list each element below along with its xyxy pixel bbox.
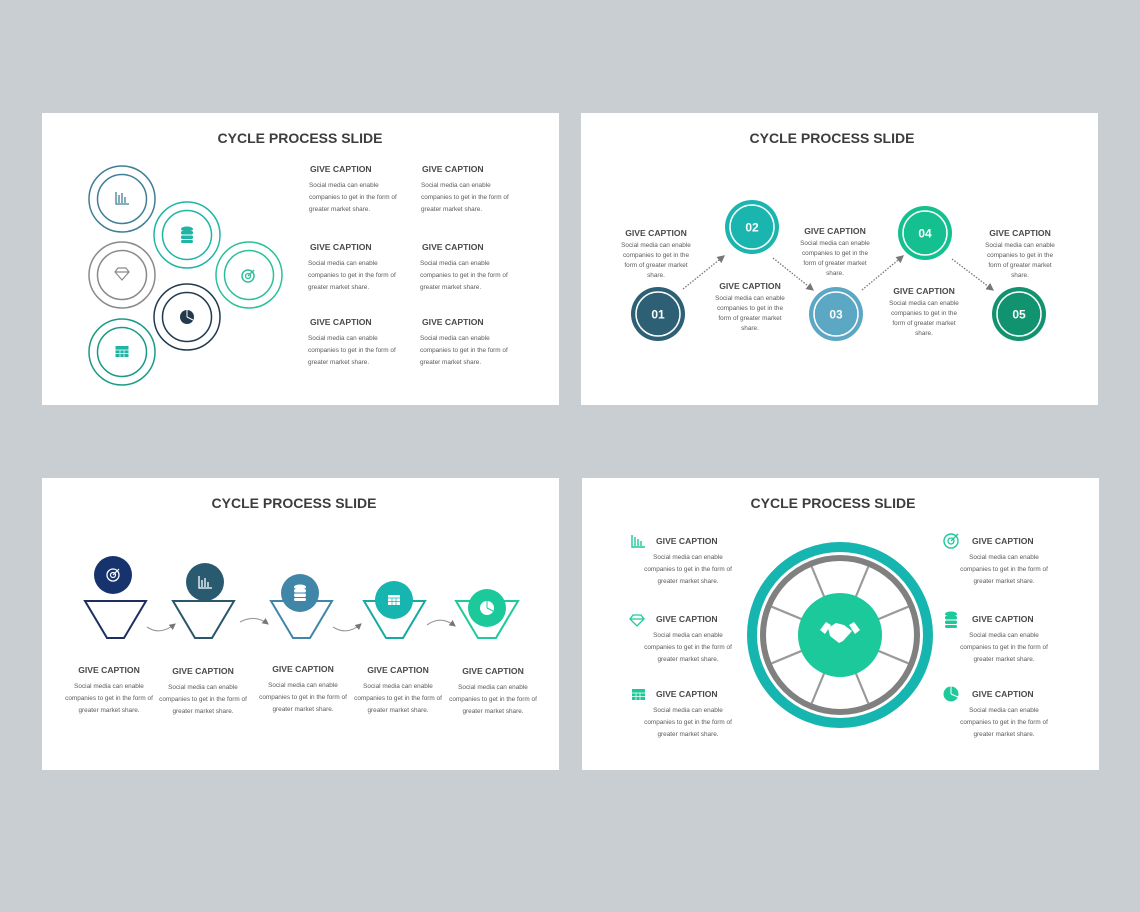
text blocks: GIVE CAPTION [310, 317, 372, 327]
left captions: Social media can enable [653, 554, 723, 561]
text blocks: share. [741, 325, 759, 332]
right captions: greater market share. [973, 578, 1035, 585]
text blocks: greater market share. [308, 284, 369, 291]
left captions: greater market share. [657, 578, 719, 585]
text blocks: GIVE CAPTION [462, 666, 524, 676]
arrows [683, 256, 993, 290]
step circles: 04 [918, 226, 932, 240]
right captions: GIVE CAPTION [972, 614, 1034, 624]
text blocks: Social media can enable [420, 260, 490, 267]
text blocks: Social media can enable [421, 182, 491, 189]
text blocks: companies to get in the form of [308, 272, 396, 279]
text blocks: GIVE CAPTION [719, 281, 781, 291]
left captions [630, 535, 732, 738]
right captions: companies to get in the form of [960, 644, 1048, 651]
text blocks: Social media can enable [268, 682, 338, 689]
text blocks: Social media can enable [621, 242, 691, 249]
right captions: greater market share. [973, 731, 1035, 738]
text blocks [65, 664, 537, 715]
icon circles [94, 556, 506, 627]
text blocks: share. [1011, 272, 1029, 279]
text blocks: companies to get in the form of [420, 347, 508, 354]
text blocks: companies to get in the form of [420, 272, 508, 279]
text blocks: GIVE CAPTION [625, 228, 687, 238]
text blocks: GIVE CAPTION [804, 226, 866, 236]
text blocks: greater market share. [421, 206, 482, 213]
left captions: companies to get in the form of [644, 719, 732, 726]
left captions: Social media can enable [653, 632, 723, 639]
text blocks: companies to get in the form of [309, 194, 397, 201]
text blocks: GIVE CAPTION [422, 164, 484, 174]
text blocks: companies to get in the form of [65, 695, 153, 702]
text blocks: companies to get in the form of [421, 194, 509, 201]
text blocks: Social media can enable [800, 240, 870, 247]
text blocks: Social media can enable [889, 300, 959, 307]
right captions: GIVE CAPTION [972, 689, 1034, 699]
text blocks: greater market share. [172, 708, 234, 715]
text blocks: Social media can enable [420, 335, 490, 342]
text blocks: form of greater market [624, 262, 688, 269]
text blocks: companies to get in the [987, 252, 1053, 259]
text blocks: greater market share. [78, 707, 140, 714]
step circles: 05 [1012, 308, 1026, 322]
text blocks: companies to get in the [623, 252, 689, 259]
title: CYCLE PROCESS SLIDE [750, 130, 914, 146]
text blocks [621, 226, 1055, 337]
right captions: Social media can enable [969, 554, 1039, 561]
text blocks: Social media can enable [985, 242, 1055, 249]
icon: handshake [820, 622, 860, 643]
step circles: 03 [829, 308, 843, 322]
text blocks [308, 164, 509, 366]
text blocks: companies to get in the [891, 310, 957, 317]
text blocks: greater market share. [462, 708, 524, 715]
right captions: Social media can enable [969, 632, 1039, 639]
text blocks: GIVE CAPTION [272, 664, 334, 674]
ring icon: bar chart [89, 166, 155, 232]
left captions: GIVE CAPTION [656, 536, 718, 546]
text blocks: companies to get in the form of [259, 694, 347, 701]
text blocks: companies to get in the form of [308, 347, 396, 354]
text blocks: greater market share. [367, 707, 429, 714]
title: CYCLE PROCESS SLIDE [218, 130, 382, 146]
text blocks: greater market share. [272, 706, 334, 713]
text blocks: Social media can enable [308, 260, 378, 267]
text blocks: GIVE CAPTION [893, 286, 955, 296]
text blocks: GIVE CAPTION [989, 228, 1051, 238]
text blocks: form of greater market [988, 262, 1052, 269]
ring icon: database [154, 202, 220, 268]
step circles: 02 [745, 220, 759, 234]
text blocks: GIVE CAPTION [367, 665, 429, 675]
text blocks: share. [826, 270, 844, 277]
text blocks: greater market share. [309, 206, 370, 213]
panel: numbered steps slide [581, 113, 1098, 405]
right captions: GIVE CAPTION [972, 536, 1034, 546]
text blocks: share. [647, 272, 665, 279]
text blocks: GIVE CAPTION [422, 317, 484, 327]
left captions: greater market share. [657, 731, 719, 738]
text blocks: share. [915, 330, 933, 337]
text blocks: form of greater market [803, 260, 867, 267]
text blocks: GIVE CAPTION [172, 666, 234, 676]
text blocks: companies to get in the form of [159, 696, 247, 703]
text blocks: Social media can enable [308, 335, 378, 342]
title: CYCLE PROCESS SLIDE [212, 495, 376, 511]
wheel [752, 547, 928, 723]
text blocks: companies to get in the [717, 305, 783, 312]
right captions: greater market share. [973, 656, 1035, 663]
left captions: greater market share. [657, 656, 719, 663]
right captions: companies to get in the form of [960, 566, 1048, 573]
text blocks: GIVE CAPTION [422, 242, 484, 252]
ring icon: diamond [89, 242, 155, 308]
step circles: 01 [651, 308, 665, 322]
left captions: GIVE CAPTION [656, 614, 718, 624]
ring icon: pie chart [154, 284, 220, 350]
text blocks: form of greater market [892, 320, 956, 327]
text blocks: companies to get in the form of [449, 696, 537, 703]
title: CYCLE PROCESS SLIDE [751, 495, 915, 511]
text blocks: companies to get in the [802, 250, 868, 257]
left captions: Social media can enable [653, 707, 723, 714]
panel: wheel slide [582, 478, 1099, 770]
curved arrows [147, 618, 455, 631]
panel: concentric circles slide [42, 113, 559, 405]
ring icon: calendar [89, 319, 155, 385]
text blocks: Social media can enable [715, 295, 785, 302]
right captions [944, 534, 1048, 738]
text blocks: Social media can enable [168, 684, 238, 691]
right captions: companies to get in the form of [960, 719, 1048, 726]
text blocks: Social media can enable [363, 683, 433, 690]
panel: funnel steps slide [42, 478, 559, 770]
right captions: Social media can enable [969, 707, 1039, 714]
text blocks: Social media can enable [74, 683, 144, 690]
ring icon: target [216, 242, 282, 308]
funnels [85, 601, 518, 638]
text blocks: greater market share. [420, 359, 481, 366]
left captions: companies to get in the form of [644, 644, 732, 651]
left captions: GIVE CAPTION [656, 689, 718, 699]
step circles [631, 200, 1046, 341]
text blocks: Social media can enable [309, 182, 379, 189]
text blocks: form of greater market [718, 315, 782, 322]
left captions: companies to get in the form of [644, 566, 732, 573]
text blocks: GIVE CAPTION [78, 665, 140, 675]
text blocks: GIVE CAPTION [310, 164, 372, 174]
text blocks: companies to get in the form of [354, 695, 442, 702]
text blocks: GIVE CAPTION [310, 242, 372, 252]
text blocks: greater market share. [420, 284, 481, 291]
text blocks: greater market share. [308, 359, 369, 366]
text blocks: Social media can enable [458, 684, 528, 691]
